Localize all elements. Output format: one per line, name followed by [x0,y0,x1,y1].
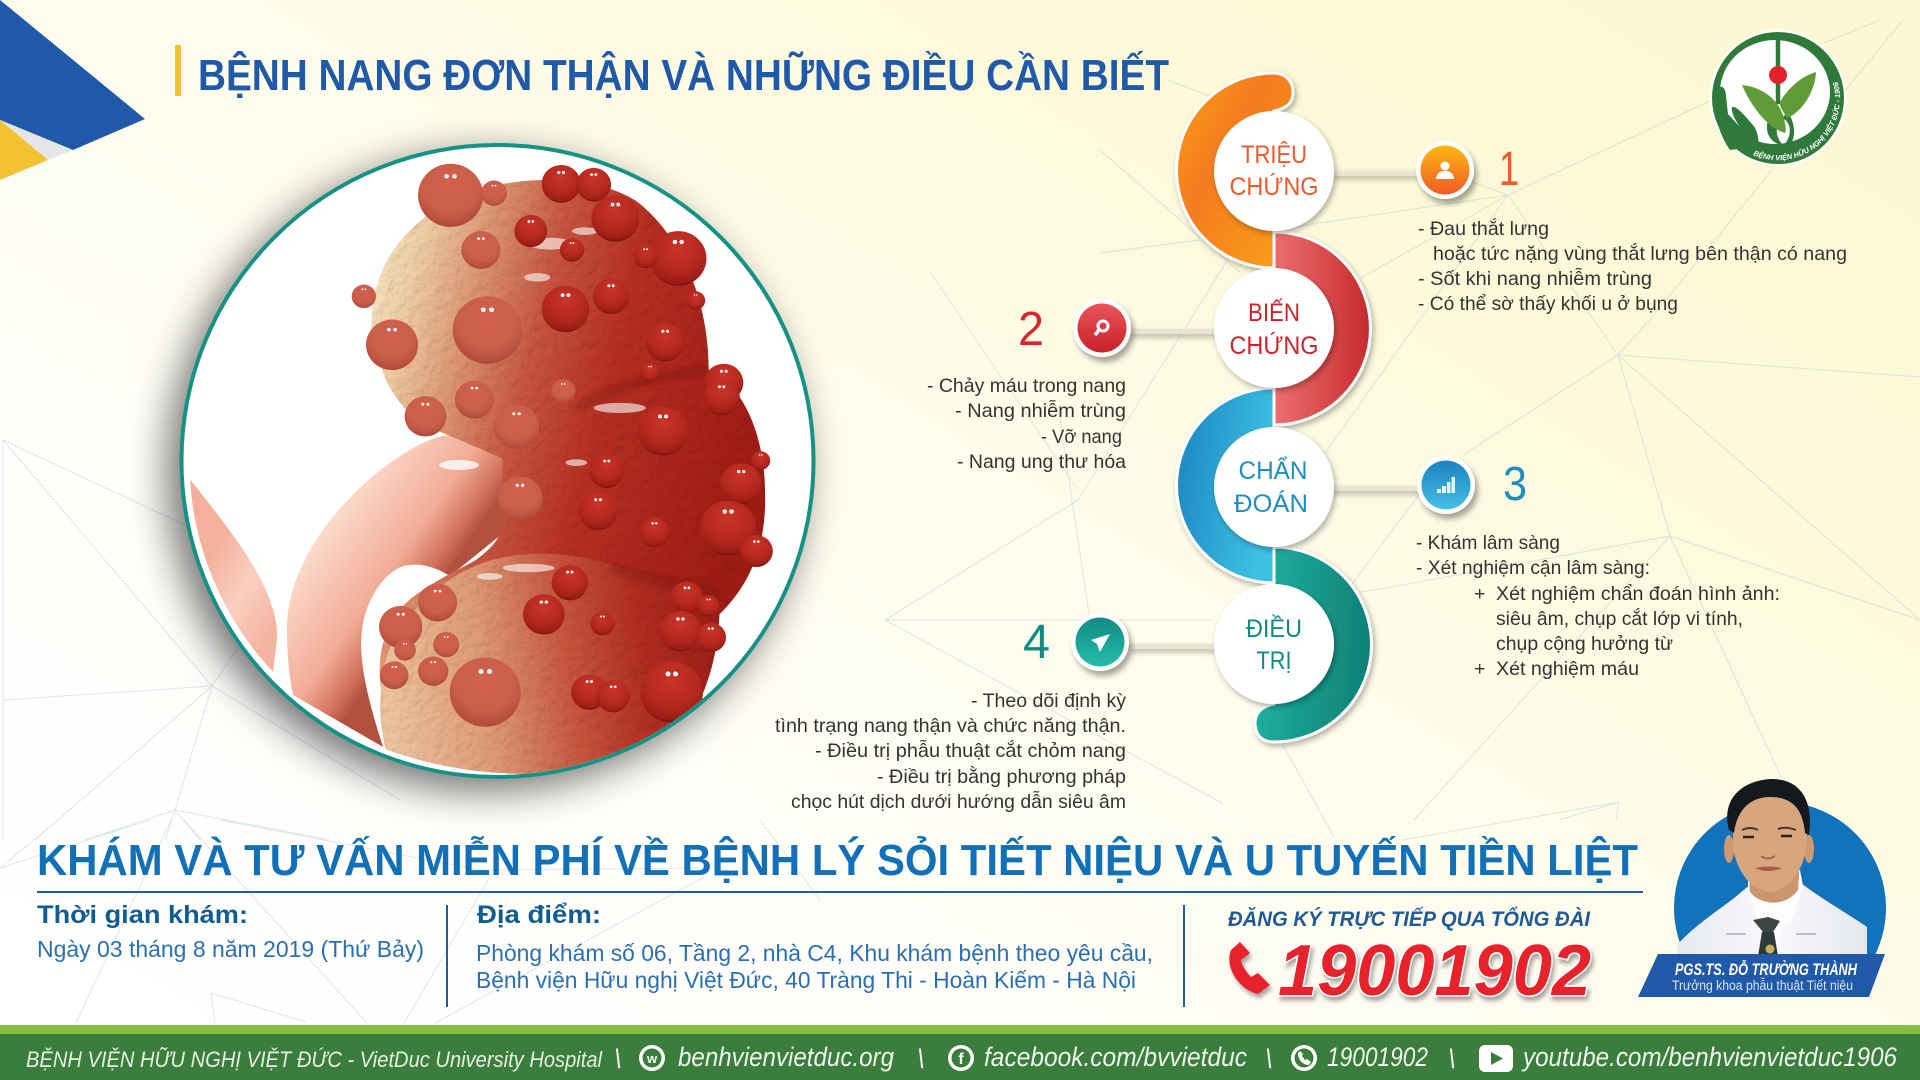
hotline: 19001902 [1278,931,1591,1011]
info: time: Ngày 03 tháng 8 năm 2019 (Thứ Bảy) [37,936,424,962]
numbers: 4 [1023,616,1050,669]
step circle: Chẩn đoán [1214,427,1334,547]
info: location: Địa điểm: [477,901,601,929]
text: diagnosis: - Khám lâm sàng [1416,532,1560,554]
text: complications: - Nang ung thư hóa [957,451,1126,473]
info: time: Thời gian khám: [37,901,248,929]
numbers: 1 [1499,143,1519,196]
footer bar: \ [1265,1044,1273,1074]
text: treatment [775,690,1126,813]
step circle: Chẩn đoán: ĐOÁN [1234,489,1308,518]
hotline [1228,907,1591,1011]
step circle: Điều trị: ĐIỀU [1246,614,1302,643]
numbers: 3 [1503,458,1527,511]
footer bar: BỆNH VIỆN HỮU NGHỊ VIỆT ĐỨC - VietDuc University Hospital [26,1047,603,1072]
icon: search badge [1073,299,1131,357]
text: symptoms: - Có thể sờ thấy khối u ở bụng [1418,293,1678,315]
footer bar: \ [614,1044,622,1074]
text: complications: - Nang nhiễm trùng [955,399,1126,422]
info: location [476,901,1153,993]
info: location: Bệnh viện Hữu nghị Việt Đức, 40 Tràng Thi - Hoàn Kiếm - Hà Nội [476,967,1136,993]
text: symptoms: - Đau thắt lưng [1418,217,1549,240]
doctor portrait [1638,779,1886,1014]
step circle: Điều trị: TRỊ [1256,647,1292,675]
footer bar: f [958,1051,964,1068]
text: diagnosis: siêu âm, chụp cắt lớp vi tính, [1496,607,1743,630]
numbers [1018,143,1527,669]
text: diagnosis: chụp cộng hưởng từ [1496,633,1673,655]
text: treatment: - Điều trị phẫu thuật cắt chỏm nang [815,739,1126,762]
doctor portrait: PGS.TS. ĐỖ TRƯỜNG THÀNH [1675,960,1858,979]
logo [1710,30,1846,166]
kidney illustration in circle [182,145,814,777]
text: treatment: - Điều trị bằng phương pháp [877,765,1126,788]
step circle: Biến chứng [1214,268,1334,388]
step circle: Điều trị [1214,584,1334,704]
text: diagnosis [1416,532,1780,680]
footer bar: \ [1448,1044,1456,1074]
corner triangles [0,0,145,180]
footer bar: 19001902 [1327,1042,1428,1072]
text: complications [927,375,1126,473]
text: complications: - Vỡ nang [1041,426,1122,448]
text: treatment: tình trạng nang thận và chức năng thận. [775,715,1126,737]
logo: BỆNH VIỆN HỮU NGHỊ VIỆT ĐỨC - 1906 [1753,82,1840,162]
text: complications: - Chảy máu trong nang [927,375,1126,397]
heading: free consultation: KHÁM VÀ TƯ VẤN MIỄN PHÍ VỀ BỆNH LÝ SỎI TIẾT NIỆU VÀ U TUYẾN TIỀN LIỆT [37,834,1638,885]
step circle: Biến chứng: BIẾN [1248,298,1300,327]
title: BỆNH NANG ĐƠN THẬN VÀ NHỮNG ĐIỀU CẦN BIẾT [198,50,1169,100]
icon: paper plane badge [1071,613,1129,671]
text: symptoms: hoặc tức nặng vùng thắt lưng bên thận có nang [1433,242,1847,265]
text: diagnosis: + [1474,583,1485,605]
text: diagnosis: - Xét nghiệm cận lâm sàng: [1416,557,1650,579]
step circle: Triệu chứng [1214,111,1334,231]
footer bar: benhvienvietduc.org [678,1042,894,1072]
text: diagnosis: Xét nghiệm máu [1496,658,1639,680]
info: time [37,901,424,962]
step circle: Chẩn đoán: CHẨN [1238,456,1308,485]
info: location: Phòng khám số 06, Tầng 2, nhà C4, Khu khám bệnh theo yêu cầu, [476,940,1153,966]
footer bar [0,1025,1920,1080]
step circle: Biến chứng: CHỨNG [1230,331,1318,360]
icon: chart badge [1417,456,1475,514]
hotline: ĐĂNG KÝ TRỰC TIẾP QUA TỔNG ĐÀI [1228,907,1591,931]
step circle: Triệu chứng: CHỨNG [1230,172,1318,201]
text: symptoms [1418,217,1847,315]
icon: person badge [1416,141,1474,199]
footer bar: \ [917,1044,925,1074]
numbers: 2 [1018,303,1044,356]
text: symptoms: - Sốt khi nang nhiễm trùng [1418,267,1652,290]
footer bar: w [646,1051,658,1066]
text: diagnosis: Xét nghiệm chẩn đoán hình ảnh: [1496,583,1780,605]
text: treatment: - Theo dõi định kỳ [971,690,1126,712]
doctor portrait: Trưởng khoa phẫu thuật Tiết niệu [1672,978,1853,993]
step circle: Triệu chứng: TRIỆU [1241,140,1307,169]
spiral band [1176,73,1372,742]
footer bar: facebook.com/bvvietduc [984,1042,1247,1072]
text: treatment: chọc hút dịch dưới hướng dẫn siêu âm [791,790,1126,813]
text: diagnosis: + [1474,658,1485,680]
connector lines [1128,171,1422,649]
